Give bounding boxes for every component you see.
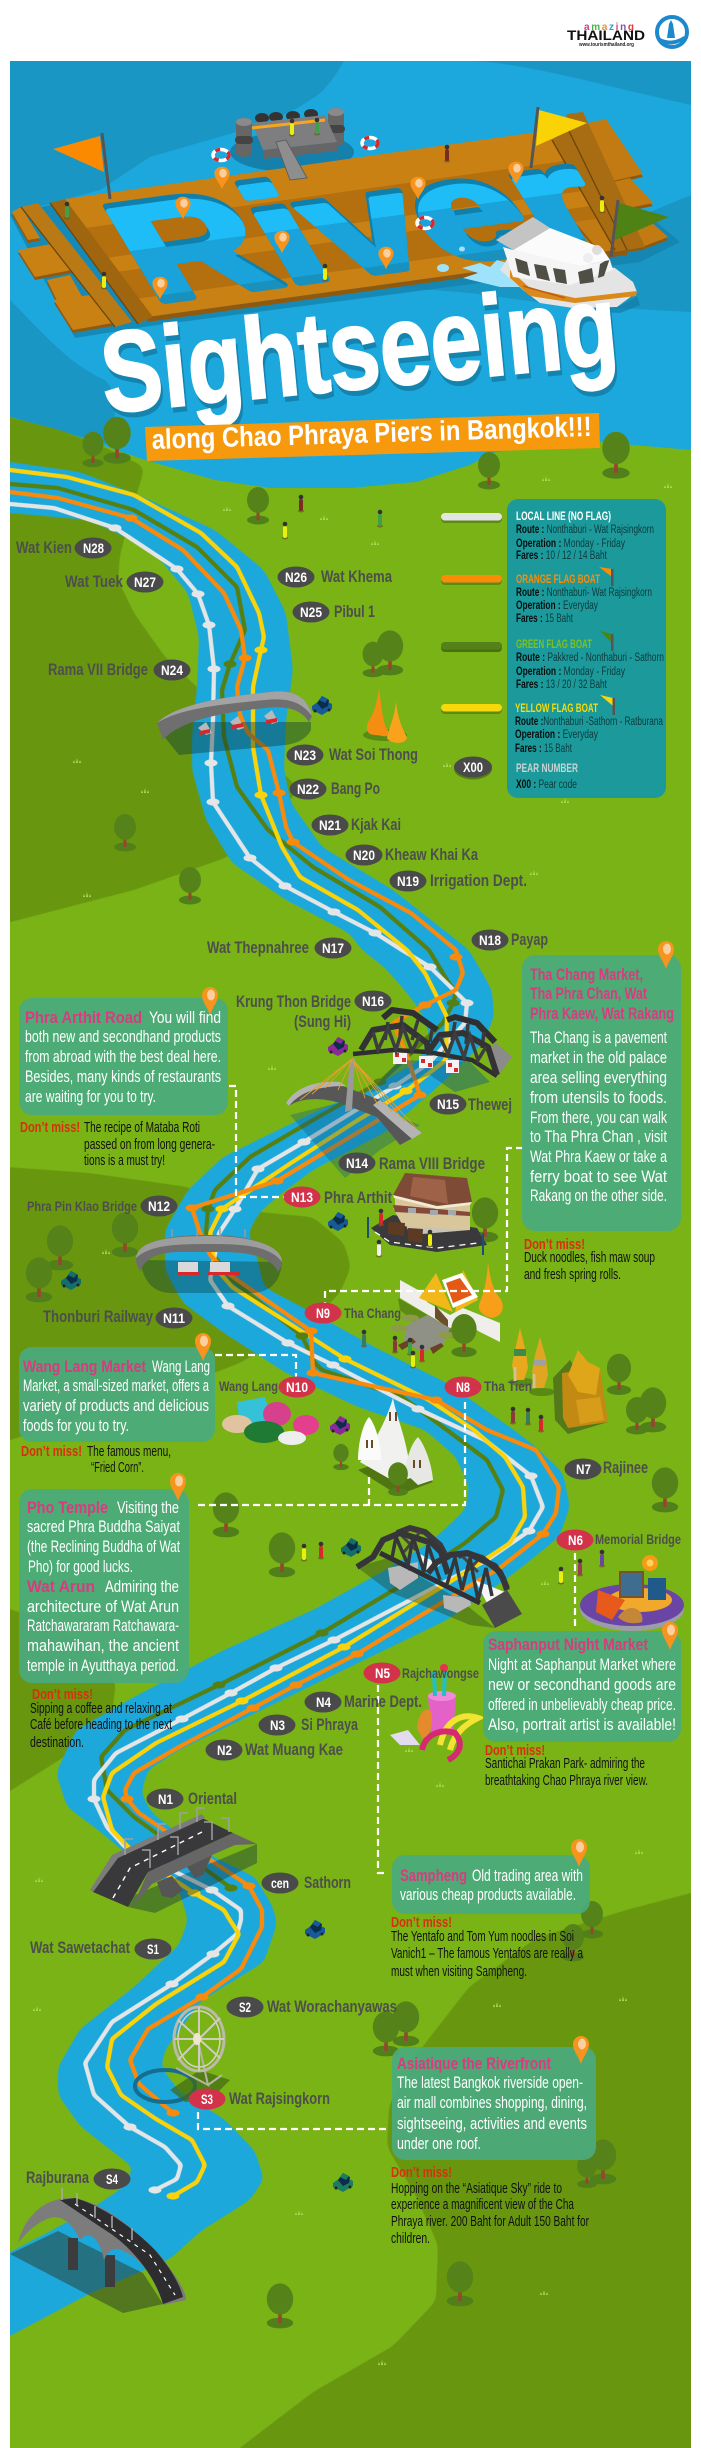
N28 Wat Kien: Wat Kien	[16, 538, 72, 557]
panel: Pho Temple and Wat Arun: temple in Ayutthaya period.	[27, 1656, 179, 1675]
panel: Pho Temple and Wat Arun: Admiring the	[105, 1577, 179, 1596]
N3 Si Phraya: N3	[270, 1717, 285, 1733]
legend panel: Route : Nonthaburi - Wat Rajsingkorn	[516, 524, 654, 536]
pier people	[64, 118, 605, 290]
panel: Wang Lang Market: Wang Lang	[152, 1357, 210, 1376]
N12 Phra Pin Klao Bridge: Phra Pin Klao Bridge	[27, 1198, 137, 1214]
N7 Rajinee: N7	[576, 1461, 591, 1477]
river	[0, 458, 570, 2352]
legend panel: Route : Nonthaburi- Wat Rajsingkorn	[516, 587, 652, 599]
route: green flag boat	[0, 483, 503, 1888]
panel: Wang Lang Market: foods for you to try.	[23, 1416, 129, 1435]
S3 Wat Rajsingkorn: Wat Rajsingkorn	[229, 2089, 330, 2108]
S4 Rajburana: S4	[106, 2171, 118, 2187]
lake water	[10, 61, 691, 488]
N27 Wat Tuek	[65, 572, 164, 592]
legend panel: Fares : 13 / 20 / 32 Baht	[516, 679, 608, 691]
N26 Wat Khema	[278, 566, 392, 588]
N3 Si Phraya	[258, 1714, 358, 1736]
N10 Wang Lang: N10	[286, 1379, 308, 1395]
N22 Bang Po	[290, 778, 380, 800]
panel: Sampheng: Sampheng	[400, 1866, 467, 1885]
panel: Saphanput Night Market: Saphanput Night Market	[488, 1635, 648, 1654]
N17 Wat Thepnahree: N17	[322, 940, 344, 956]
legend panel: Fares : 15 Baht	[516, 613, 574, 625]
panel: Asiatique the Riverfront: Asiatique the Riverfront	[397, 2054, 551, 2073]
logo: Amazing Thailand: www.tourismthailand.org	[578, 42, 634, 48]
panel: Phra Arthit Road: Phra Arthit Road	[25, 1008, 142, 1027]
pin	[170, 1473, 186, 1501]
don't miss: Saphanput	[485, 1742, 648, 1789]
don't miss: Sampheng: must when visiting Sampheng.	[391, 1964, 527, 1980]
panel: Pho Temple and Wat Arun: sacred Phra Buddha Saiyat	[27, 1517, 180, 1536]
trees	[26, 417, 678, 2328]
panel: Phra Arthit Road: Besides, many kinds of restaurants	[25, 1067, 221, 1086]
N11 Thonburi Railway: Thonburi Railway	[43, 1307, 153, 1326]
legend panel: GREEN FLAG BOAT	[516, 637, 592, 651]
N16 Krung Thon Bridge: (Sung Hi)	[294, 1012, 351, 1031]
pin	[571, 1839, 587, 1867]
don't miss: Pho Temple: Don’t miss!	[32, 1686, 93, 1703]
logo: Marine Department seal	[657, 17, 687, 47]
S1 Wat Sawetachat: S1	[147, 1941, 159, 1957]
stations: white	[88, 524, 538, 2194]
panel: Tha Chang Market: from utensils to foods.	[530, 1088, 667, 1107]
legend panel: Operation : Monday - Friday	[516, 538, 625, 550]
don't miss: Asiatique: Don’t miss!	[391, 2164, 452, 2181]
don't miss: Pho Temple: Sipping a coffee and relaxing at	[30, 1701, 172, 1717]
S2 Wat Worachanyawas: Wat Worachanyawas	[267, 1997, 397, 2016]
N23 Wat Soi Thong	[286, 744, 418, 766]
N19 Irrigation Dept.: N19	[397, 873, 419, 889]
panel: Saphanput Night Market	[483, 1622, 681, 1742]
panel: Wang Lang Market	[19, 1333, 215, 1442]
icon: riverside hotel at Phra Arthit	[368, 1173, 487, 1255]
panel: Sampheng	[392, 1839, 590, 1914]
panel: Tha Chang Market: Tha Chang Market,	[530, 965, 643, 984]
icon: Wang Lang market food	[222, 1397, 319, 1445]
flag: orange	[53, 133, 110, 199]
panel: Pho Temple and Wat Arun: Pho) for good lucks.	[28, 1557, 133, 1576]
N2 Wat Muang Kae: Wat Muang Kae	[245, 1740, 343, 1759]
N3 Si Phraya: Si Phraya	[301, 1715, 358, 1734]
subtitle banner: along Chao Phraya Piers in Bangkok!!!	[151, 411, 592, 455]
don't miss: Wang Lang: Don’t miss!	[21, 1443, 82, 1460]
S2 Wat Worachanyawas	[226, 1996, 397, 2018]
legend panel: Route : Pakkred - Nonthaburi - Sathorn	[516, 652, 664, 664]
N16 Krung Thon Bridge: N16	[362, 993, 384, 1009]
panel: Tha Chang Market	[522, 941, 681, 1231]
cen Sathorn: cen	[271, 1875, 289, 1891]
S2 Wat Worachanyawas: S2	[239, 1999, 251, 2015]
don't miss: Asiatique: experience a magnificent view of the Cha	[391, 2197, 575, 2213]
panel: Phra Arthit Road: from abroad with the best deal here.	[25, 1047, 221, 1066]
flag: yellow	[531, 107, 587, 168]
N22 Bang Po: Bang Po	[331, 779, 380, 798]
don't miss: Wang Lang	[21, 1443, 171, 1476]
N28 Wat Kien	[16, 538, 112, 558]
panel: Asiatique the Riverfront: air mall combines shopping, dining,	[397, 2093, 587, 2112]
don't miss: Asiatique	[391, 2164, 589, 2247]
pier pins	[152, 162, 524, 299]
N4 Marine Dept.: Marine Dept.	[344, 1692, 422, 1711]
word River walls: River	[78, 117, 635, 331]
beams	[21, 203, 132, 327]
N20 Kheaw Khai Ka: N20	[353, 847, 375, 863]
panel: Pho Temple and Wat Arun: Wat Arun	[27, 1577, 95, 1596]
don't miss: Tha Chang: Don’t miss!	[524, 1236, 585, 1253]
N26 Wat Khema: Wat Khema	[321, 567, 392, 586]
don't miss: Saphanput: Don’t miss!	[485, 1742, 545, 1759]
N15 Thewej	[430, 1094, 512, 1114]
N2 Wat Muang Kae	[206, 1740, 343, 1760]
N18 Payap: Payap	[511, 930, 548, 949]
N5 Rajchawongse: N5	[375, 1665, 390, 1681]
pontoon shadow	[230, 132, 354, 172]
N1 Oriental: N1	[158, 1791, 173, 1807]
N11 Thonburi Railway: N11	[163, 1310, 185, 1326]
logo: Amazing Thailand: THAILAND	[567, 28, 645, 43]
N4 Marine Dept.: N4	[316, 1694, 331, 1710]
logo: Amazing Thailand: amazing	[584, 22, 634, 33]
don't miss: Asiatique: Phraya river. 200 Baht for Adult 150 Baht for	[391, 2214, 589, 2230]
N22 Bang Po: N22	[297, 781, 319, 797]
stations: orange	[120, 514, 550, 2117]
panel: Tha Chang Market: ferry boat to see Wat	[530, 1167, 667, 1186]
don't miss: Sampheng: Vanich1 – The famous Yentafos are really a	[391, 1946, 584, 1962]
N14 Rama VIII Bridge	[338, 1152, 485, 1174]
don't miss: Pho Temple: destination.	[30, 1735, 84, 1751]
N9 Tha Chang: N9	[316, 1305, 330, 1321]
don't miss: Tha Chang: and fresh spring rolls.	[524, 1267, 621, 1283]
N5 Rajchawongse: Rajchawongse	[402, 1665, 479, 1681]
don't miss: Sampheng	[391, 1914, 584, 1980]
N6 Memorial Bridge	[556, 1530, 681, 1550]
N1 Oriental: Oriental	[188, 1789, 237, 1808]
panel: Phra Arthit Road: are waiting for you to try.	[25, 1087, 156, 1106]
cen Sathorn	[262, 1872, 351, 1894]
N20 Kheaw Khai Ka	[346, 844, 478, 866]
N19 Irrigation Dept.: Irrigation Dept.	[430, 871, 527, 890]
panel: Pho Temple and Wat Arun: Ratchawararam Ratchawara-	[27, 1616, 179, 1635]
icon: Asiatique ferris wheel	[135, 2007, 230, 2102]
N13 Phra Arthit: Phra Arthit	[324, 1188, 392, 1207]
panel: Sampheng: various cheap products available.	[400, 1885, 576, 1904]
panel: Pho Temple and Wat Arun: Visiting the	[117, 1498, 179, 1517]
legend panel: ORANGE FLAG BOAT	[516, 572, 600, 586]
legend panel: X00 : Pear code	[516, 779, 577, 791]
panel: Phra Arthit Road: You will find	[149, 1008, 221, 1027]
N7 Rajinee: Rajinee	[603, 1458, 648, 1477]
panel: Pho Temple and Wat Arun: Pho Temple	[27, 1498, 108, 1517]
S3 Wat Rajsingkorn: S3	[201, 2091, 213, 2107]
right planks	[575, 122, 668, 255]
don't miss: Phra Arthit: passed on from long genera-	[84, 1137, 215, 1153]
N10 Wang Lang: Wang Lang	[219, 1378, 278, 1394]
S3 Wat Rajsingkorn	[188, 2088, 330, 2110]
don't miss: Phra Arthit: tions is a must try!	[84, 1153, 165, 1169]
S4 Rajburana: Rajburana	[26, 2168, 89, 2187]
S1 Wat Sawetachat: Wat Sawetachat	[30, 1938, 130, 1957]
N8 Tha Tien: Tha Tien	[484, 1378, 532, 1394]
don't miss: Pho Temple: Café before heading to the next	[30, 1717, 172, 1733]
icon: Grand Palace at Tha Chang	[361, 1262, 503, 1368]
dashed leader lines	[198, 1086, 575, 2129]
life rings	[213, 138, 433, 228]
panel: Pho Temple and Wat Arun	[19, 1473, 189, 1683]
N9 Tha Chang	[304, 1302, 401, 1324]
grass tufts	[33, 476, 672, 2365]
boat	[437, 217, 640, 313]
icon: reclining Buddha	[553, 1350, 608, 1434]
N5 Rajchawongse	[364, 1662, 479, 1684]
pontoon	[235, 108, 345, 180]
N18 Payap: N18	[479, 932, 501, 948]
logo: Amazing Thailand	[567, 22, 645, 48]
panel: Phra Arthit Road: both new and secondhand products	[25, 1027, 221, 1046]
N26 Wat Khema: N26	[285, 569, 307, 585]
panel: Wang Lang Market: Market, a small-sized market, offers a	[23, 1376, 209, 1395]
people figures	[282, 495, 605, 1585]
legend panel: Fares : 10 / 12 / 14 Baht	[516, 550, 608, 562]
N14 Rama VIII Bridge: N14	[346, 1155, 368, 1171]
legend panel: YELLOW FLAG BOAT	[515, 701, 598, 715]
deck stripes	[85, 160, 616, 299]
panel: Pho Temple and Wat Arun: architecture of Wat Arun	[27, 1597, 179, 1616]
don't miss: Pho Temple	[30, 1686, 172, 1751]
legend panel	[507, 499, 666, 798]
icon: temple spires near N23	[363, 688, 407, 743]
N25 Pibul 1	[292, 602, 375, 622]
N8 Tha Tien	[444, 1376, 532, 1398]
cen Sathorn: Sathorn	[304, 1873, 351, 1892]
left planks	[12, 210, 113, 333]
legend sample pill X00	[454, 756, 492, 780]
don't miss: Sampheng: The Yentafo and Tom Yum noodles in Soi	[391, 1929, 574, 1945]
bridge: Rajburana	[10, 2188, 186, 2313]
N9 Tha Chang: Tha Chang	[344, 1305, 401, 1321]
N13 Phra Arthit: N13	[291, 1189, 313, 1205]
pin	[573, 2036, 589, 2064]
bridge: Krung Thon	[353, 1010, 512, 1092]
don't miss: Phra Arthit: Don’t miss!	[20, 1119, 80, 1136]
don't miss: Phra Arthit: The recipe of Mataba Roti	[84, 1120, 200, 1136]
don't miss: Wang Lang: The famous menu,	[87, 1444, 171, 1460]
bridge: Rama VII	[157, 691, 312, 755]
N23 Wat Soi Thong: N23	[294, 747, 316, 763]
route: yellow flag boat	[0, 469, 525, 2196]
word River water surface: River	[81, 122, 638, 336]
route: local white line	[0, 503, 543, 2190]
don't miss: Asiatique: Hopping on the “Asiatique Sky” ride to	[391, 2181, 562, 2197]
deck side	[147, 251, 627, 322]
N18 Payap	[472, 930, 548, 950]
flag: green	[611, 200, 669, 257]
N21 Kjak Kai	[312, 814, 401, 836]
don't miss: Asiatique: children.	[391, 2231, 430, 2247]
N15 Thewej: Thewej	[468, 1095, 512, 1114]
N7 Rajinee	[564, 1458, 648, 1480]
panel: Tha Chang Market: area selling everything	[530, 1068, 667, 1087]
legend sample pill X00: X00	[463, 759, 483, 775]
pier shadow	[10, 205, 680, 338]
don't miss: Phra Arthit	[20, 1119, 215, 1169]
N4 Marine Dept.	[304, 1692, 422, 1712]
N24 Rama VII Bridge: Rama VII Bridge	[48, 660, 148, 679]
don't miss: Sampheng: Don’t miss!	[391, 1914, 452, 1931]
icon: giant guardian statues	[509, 1328, 555, 1396]
N6 Memorial Bridge: N6	[568, 1532, 583, 1548]
deck top	[65, 130, 627, 317]
don't miss: Wang Lang: “Fried Corn”.	[91, 1460, 144, 1476]
legend panel: Operation : Everyday	[515, 729, 598, 741]
legend panel: Fares : 15 Baht	[515, 743, 573, 755]
icon: Saphanput night market stall	[580, 1555, 684, 1631]
panel: Pho Temple and Wat Arun: (the Reclining Buddha of Wat	[27, 1537, 180, 1556]
icon: Wat Arun	[358, 1398, 433, 1496]
N23 Wat Soi Thong: Wat Soi Thong	[329, 745, 418, 764]
panel: Asiatique the Riverfront: The latest Bangkok riverside open-	[397, 2073, 583, 2092]
panel: Wang Lang Market: variety of products and delicious	[23, 1396, 209, 1415]
darker water shapes	[10, 61, 691, 445]
N16 Krung Thon Bridge	[236, 990, 392, 1031]
N20 Kheaw Khai Ka: Kheaw Khai Ka	[385, 845, 478, 864]
N15 Thewej: N15	[437, 1096, 459, 1112]
panel: Asiatique the Riverfront	[392, 2036, 596, 2160]
N13 Phra Arthit	[284, 1186, 392, 1208]
don't miss: Tha Chang	[524, 1236, 655, 1283]
N27 Wat Tuek: Wat Tuek	[65, 572, 123, 591]
panel: Sampheng: Old trading area with	[472, 1866, 583, 1885]
N8 Tha Tien: N8	[456, 1379, 470, 1395]
N27 Wat Tuek: N27	[134, 574, 156, 590]
N1 Oriental	[146, 1788, 237, 1810]
icon: Rajchawongse goods	[390, 1664, 478, 1760]
bridge: Memorial	[357, 1528, 522, 1628]
cars	[61, 696, 361, 2192]
pin	[195, 1333, 211, 1361]
pin	[202, 987, 218, 1015]
N16 Krung Thon Bridge: Krung Thon Bridge	[236, 992, 351, 1011]
N12 Phra Pin Klao Bridge: N12	[148, 1198, 170, 1214]
N25 Pibul 1: Pibul 1	[334, 602, 375, 621]
N28 Wat Kien: N28	[83, 540, 104, 556]
stations: green	[202, 660, 460, 1892]
N10 Wang Lang	[219, 1376, 316, 1398]
legend panel: Operation : Monday - Friday	[516, 666, 625, 678]
pin	[658, 941, 674, 969]
N21 Kjak Kai: Kjak Kai	[351, 815, 401, 834]
legend panel: PEAR NUMBER	[516, 761, 578, 775]
pier deck with cut-out word River	[10, 112, 680, 338]
pin	[662, 1622, 678, 1650]
bridge: Phra Pin Klao	[136, 1228, 282, 1293]
panel: Asiatique the Riverfront: under one roof.	[397, 2134, 481, 2153]
N2 Wat Muang Kae: N2	[217, 1742, 232, 1758]
bridge: Taksin at Sathorn	[90, 1808, 257, 1913]
people near Tha Tien	[510, 1407, 544, 1432]
N25 Pibul 1: N25	[300, 604, 322, 620]
panel: Tha Chang Market: Tha Phra Chan, Wat	[530, 984, 647, 1003]
N14 Rama VIII Bridge: Rama VIII Bridge	[379, 1154, 485, 1173]
legend panel: LOCAL LINE (NO FLAG)	[516, 509, 611, 523]
N19 Irrigation Dept.	[390, 870, 527, 892]
legend panel: Operation : Everyday	[516, 600, 598, 612]
legend line samples	[441, 513, 502, 714]
panel: Pho Temple and Wat Arun: mahawihan, the ancient	[27, 1636, 179, 1655]
panel: Wang Lang Market: Wang Lang Market	[23, 1357, 146, 1376]
N17 Wat Thepnahree: Wat Thepnahree	[207, 938, 309, 957]
stations: yellow	[166, 646, 412, 2200]
route: orange flag boat	[0, 491, 559, 2113]
panel: Phra Arthit Road	[19, 987, 228, 1115]
panel: Asiatique the Riverfront: sightseeing, activities and events	[397, 2114, 587, 2133]
N24 Rama VII Bridge: N24	[161, 662, 183, 678]
bridge: Rama VIII cable stayed	[286, 1058, 422, 1178]
N21 Kjak Kai: N21	[319, 817, 341, 833]
